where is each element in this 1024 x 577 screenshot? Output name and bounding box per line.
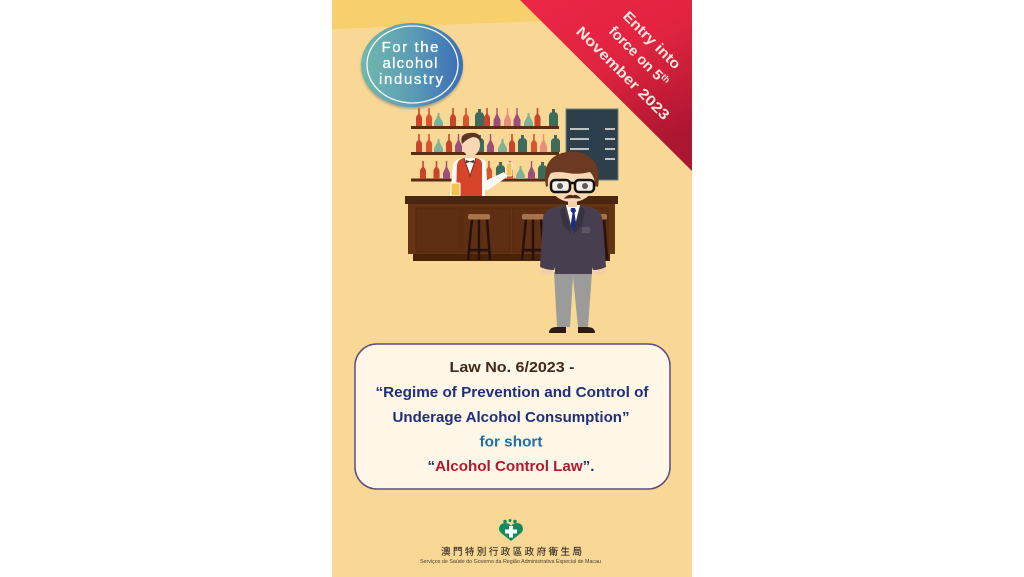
bar back: shelves and bottles [411,108,560,182]
badge: for the alcohol industry [361,23,463,109]
corner ribbon: entry into force: Entry into [619,9,684,73]
health bureau logo: 澳門特別行政區政府衛生局 [441,546,582,558]
law description box: “Alcohol Control Law”. [428,458,594,475]
corner ribbon: entry into force: force on 5 [605,24,665,84]
shoes [549,327,595,333]
health bureau logo: Serviços de Saúde do Governo da Região Administrativa Especial de Macau [420,559,601,565]
law description box: Underage Alcohol Consumption” [392,409,630,426]
bar counter with stools [405,196,618,261]
moustache [565,195,580,198]
head [548,158,596,202]
bartender [450,133,512,197]
law description box: “Regime of Prevention and Control of [376,384,650,401]
glasses [551,180,594,192]
stool middle [522,214,544,260]
legs [554,272,592,327]
law description box: Law No. 6/2023 - [450,359,574,376]
health bureau logo [420,519,601,565]
corner ribbon: entry into force [520,0,692,171]
jacket [540,205,606,274]
badge: for the alcohol industry: For the [382,39,438,56]
logo icon: heart with cross [499,519,523,541]
stool left [468,214,490,260]
law description box [355,344,670,489]
hair [545,152,599,187]
poster panel [332,0,692,577]
corner ribbon: entry into force: November 2023 [572,24,672,124]
man in suit [540,152,606,333]
badge: for the alcohol industry: alcohol [382,55,438,72]
stool right [596,214,607,260]
menu board [566,109,618,180]
badge: for the alcohol industry: industry [379,71,444,88]
corner ribbon: entry into force: th [659,72,672,85]
law description box: for short [480,434,542,450]
hands [541,268,605,275]
top yellow band [332,0,541,29]
